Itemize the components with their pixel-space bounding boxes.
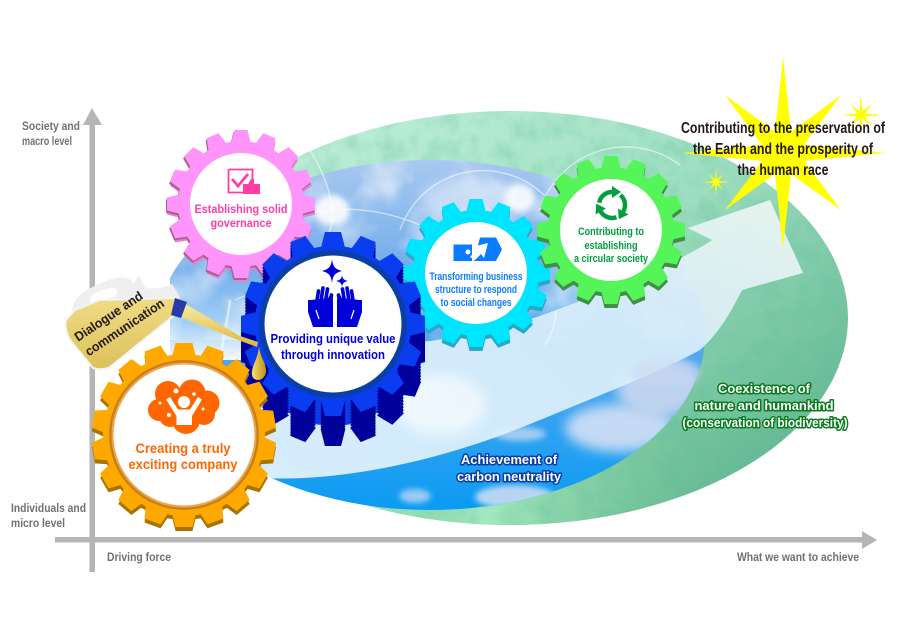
white arrow swoosh — [250, 200, 803, 479]
small star: lower left — [703, 168, 729, 195]
gear label — [270, 332, 396, 362]
oil jug: dialogue and communication — [66, 275, 266, 380]
gear label: governance — [210, 218, 272, 230]
label: achievement of carbon neutrality: Achievement of — [461, 452, 558, 467]
oil drop — [252, 346, 266, 380]
gear: creating a truly exciting company — [91, 343, 277, 531]
jug handle — [72, 275, 180, 312]
spout tube — [180, 302, 258, 347]
gear label — [574, 226, 649, 265]
small star: upper right — [842, 95, 882, 135]
gear label: structure to respond — [435, 284, 517, 296]
gear: providing unique value through innovation — [241, 232, 425, 446]
gear label: exciting company — [128, 457, 238, 472]
jug label: communication — [82, 295, 167, 359]
goal text — [681, 120, 886, 179]
axis label: individuals and micro level — [11, 501, 86, 530]
axis label: society and macro level: Society and — [22, 119, 80, 133]
label: coexistence of nature and humankind: Coexistence of — [718, 381, 811, 396]
panel: coexistence of nature ellipse — [293, 111, 848, 525]
gear: contributing to a circular society — [537, 156, 685, 308]
gear label — [128, 441, 238, 472]
jug body — [66, 298, 181, 369]
icon: cloud with cheering person — [148, 380, 220, 434]
gear label — [430, 271, 522, 309]
gear label: Contributing to — [578, 226, 644, 238]
jug label: Dialogue and — [71, 288, 146, 344]
gear label: a circular society — [574, 253, 649, 265]
gear label: Transforming business — [430, 271, 522, 283]
axis label: what we want to achieve: What we want to achieve — [737, 550, 859, 564]
label: coexistence of nature and humankind — [682, 381, 848, 430]
gear label: Providing unique value — [270, 332, 396, 346]
gear label: Establishing solid — [194, 204, 288, 216]
gear label: establishing — [584, 240, 638, 252]
label: achievement of carbon neutrality: carbon neutrality — [457, 469, 562, 484]
axis label: society and macro level — [22, 119, 80, 148]
label: achievement of carbon neutrality — [457, 452, 562, 484]
vertical axis arrow — [83, 108, 102, 572]
label: coexistence of nature and humankind: (conservation of biodiversity) — [682, 415, 848, 430]
icon: recycling arrows — [588, 184, 636, 228]
axis label: driving force: Driving force — [107, 550, 171, 564]
horizontal axis arrow — [55, 531, 877, 549]
gear: establishing solid governance — [166, 130, 315, 282]
goal text: the Earth and the prosperity of — [693, 141, 874, 158]
glow lines and light flares — [222, 147, 680, 350]
axis label: individuals and micro level: micro level — [11, 516, 65, 530]
gear: transforming business structure — [402, 199, 550, 351]
goal text: the human race — [738, 162, 829, 179]
panel: carbon neutrality sky ellipse — [155, 150, 710, 510]
gear label: through innovation — [281, 348, 385, 362]
axis label: society and macro level: macro level — [22, 134, 72, 148]
gear label — [194, 204, 288, 230]
gear label: Creating a truly — [136, 441, 231, 456]
icon: square and hexagon with arrow — [454, 238, 502, 261]
gear label: to social changes — [440, 297, 512, 309]
icon: hands with sparkles — [308, 259, 362, 327]
spout cap — [171, 298, 187, 318]
label: coexistence of nature and humankind: nature and humankind — [694, 398, 834, 413]
big yellow star — [682, 57, 885, 248]
icon: checkbox and thumbs up — [228, 170, 260, 194]
axis label: individuals and micro level: Individuals and — [11, 501, 86, 515]
